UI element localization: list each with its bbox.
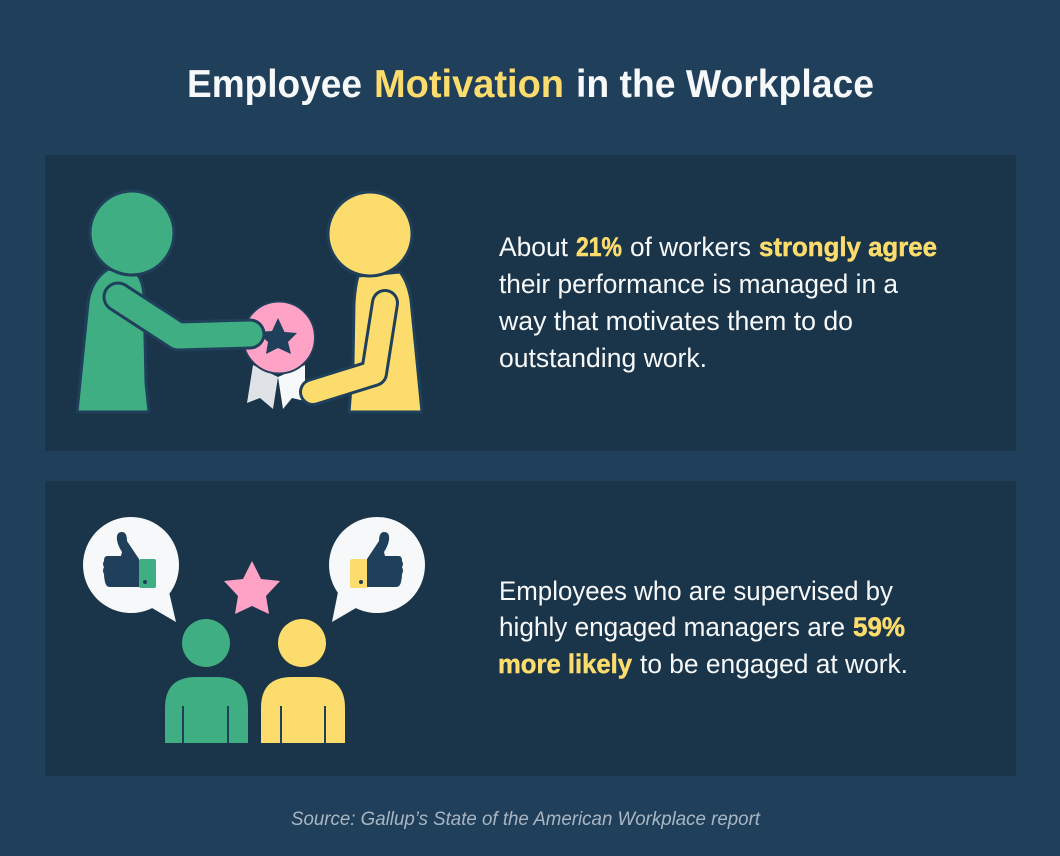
text block: 59% more likely: highly engaged managers are	[499, 612, 845, 642]
text block: 21% of workers: outstanding work.	[499, 343, 707, 373]
illustration: two people with thumbs up	[83, 517, 425, 743]
title: Motivation	[374, 63, 564, 106]
text block: 59% more likely	[498, 576, 908, 679]
text block: 59% more likely: to be engaged at work.	[640, 649, 908, 679]
icon: award ribbon	[243, 302, 315, 409]
icon: yellow person	[261, 619, 345, 743]
icon: pink star	[224, 561, 280, 614]
title: Employee	[187, 63, 362, 106]
illustration: two people exchanging an award ribbon	[77, 191, 422, 412]
title	[187, 63, 874, 106]
text block: 59% more likely: 59%	[853, 612, 905, 642]
text block: 21% of workers: 21%	[576, 232, 622, 262]
text block: 21% of workers: way that motivates them to do	[498, 306, 853, 336]
text block: 21% of workers: of workers	[630, 232, 751, 262]
title: in the Workplace	[576, 63, 874, 106]
text block: 21% of workers: their performance is managed in a	[499, 269, 898, 299]
text block: 21% of workers	[498, 232, 937, 373]
panel: engaged managers	[45, 481, 1016, 776]
text block: 59% more likely: Employees who are supervised by	[499, 576, 894, 606]
icon: yellow person	[313, 192, 422, 412]
icon: green arm	[118, 297, 250, 336]
icon: left speech bubble with thumbs up	[83, 517, 179, 622]
text block: 21% of workers: strongly agree	[759, 232, 937, 262]
icon: green person	[165, 619, 248, 743]
source note: Source: Gallup’s State of the American Workplace report	[291, 809, 761, 830]
icon: green person	[77, 191, 174, 412]
panel: performance management	[45, 155, 1016, 451]
text block: 21% of workers: About	[499, 232, 569, 262]
text block: 59% more likely: more likely	[498, 649, 632, 679]
icon: right speech bubble with thumbs up	[329, 517, 425, 622]
